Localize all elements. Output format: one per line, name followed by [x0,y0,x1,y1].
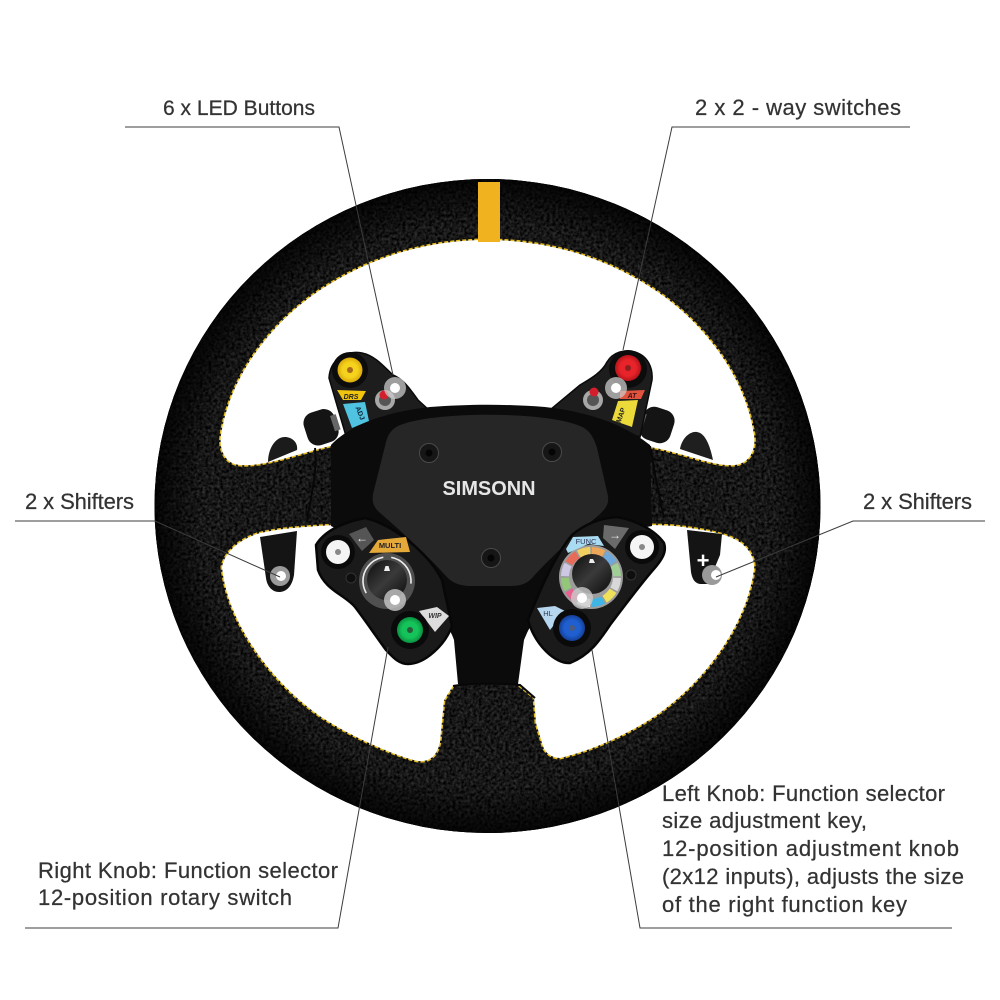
bolt [346,573,356,583]
icon: white button [321,535,355,569]
seam: bottom cuff [453,684,535,698]
label: right shifters: 2 x Shifters [863,489,972,514]
label: arrow tag [603,525,629,549]
pod body [550,351,652,437]
text block: left knob: Left Knob: Function selector [662,781,945,806]
icon: white button [625,530,659,564]
icon: multi knob [359,553,415,609]
icon: toggle switch [375,390,395,410]
label: HL [537,606,565,630]
leather seams [307,446,664,698]
icon: toggle switch [583,388,603,410]
stitched upper opening [222,241,753,464]
top-right button pod [550,350,652,437]
leader: LED buttons [125,127,393,375]
callout dot [605,377,627,399]
bolt: upper right [542,442,562,462]
label: DRS: DRS [344,394,359,401]
label: HL: HL [543,609,553,618]
hub plate [373,415,608,586]
central hub [331,405,652,684]
icon: blue button [553,609,591,647]
icon: func selector ring [555,541,627,613]
label: AT: AT [627,393,637,400]
rim edge shading [154,179,820,833]
label: arrow tag: ← [356,531,368,545]
label: MAP: MAP [616,407,628,424]
rim base [154,179,820,833]
hub body [331,405,652,684]
callout dot [384,589,406,611]
knob: left side [301,406,343,448]
label: arrow tag: → [609,528,621,542]
text block: left knob: (2x12 inputs), adjusts the size [662,864,964,889]
lower right opening fill [518,526,753,757]
label: WIP: WIP [428,613,442,620]
label: 2 x 2-way switches: 2 x 2 - way switches [695,95,901,120]
label: arrow tag [349,527,374,551]
stitched lower left opening [223,526,458,760]
text block: left knob: of the right function key [662,892,907,917]
label: FUNC: FUNC [576,537,597,546]
rotary knobs side [301,403,677,448]
label: 6 x LED Buttons: 6 x LED Buttons [163,97,315,120]
text block: right knob: 12-position rotary switch [38,885,292,910]
paddle: upper left [268,437,297,462]
shifter paddles [260,432,722,592]
seam: left cuff [307,448,316,522]
callout dot [571,587,593,609]
text block: left knob: size adjustment key, [662,808,867,833]
text block: right knob: Right Knob: Function selector [38,858,338,883]
leader: right shifter [716,521,985,577]
upper opening fill [222,241,753,464]
paddle: lower left [260,531,297,592]
leader: right knob [25,647,388,928]
label: FUNC [566,536,604,553]
top-left button pod [329,352,430,441]
dot: right shifter [702,565,722,585]
leader: 2-way switches [623,127,910,350]
paddle: lower right [687,530,722,584]
label: left shifters: 2 x Shifters [25,489,134,514]
pod body [528,517,665,663]
stitched lower right opening [518,526,753,757]
pod body [316,518,452,664]
label: MULTI [369,537,410,553]
icon: yellow button [332,352,368,388]
lower-left button pod [316,518,452,664]
icon: green button [391,611,429,649]
text block: left knob [662,781,964,917]
rim leather texture [154,179,820,833]
paddle: upper right [680,432,713,460]
logo: SIMSONN [442,478,536,500]
label: MULTI: MULTI [379,541,401,550]
label: WIP [419,607,449,632]
bolt: upper left [420,444,438,462]
leader: left shifter [15,521,280,577]
callout dot [384,377,406,399]
bolt [626,570,636,580]
steering wheel rim [154,179,820,833]
yellow top marker [478,182,500,242]
shifter callout dots [270,565,722,586]
knob: right side [634,403,677,446]
bolt: bottom [482,548,500,568]
text block: right knob [38,858,338,910]
plus sign: + [697,548,709,573]
lower-right button pod [528,517,665,663]
pod body [329,352,430,441]
lower left opening fill [223,526,458,760]
label: ADJ: ADJ [354,406,365,421]
leader: left knob [592,650,952,928]
dot: left shifter [270,566,290,586]
text block: left knob: 12-position adjustment knob [662,836,959,861]
icon: red button [609,350,647,388]
seam: right cuff [650,446,664,518]
